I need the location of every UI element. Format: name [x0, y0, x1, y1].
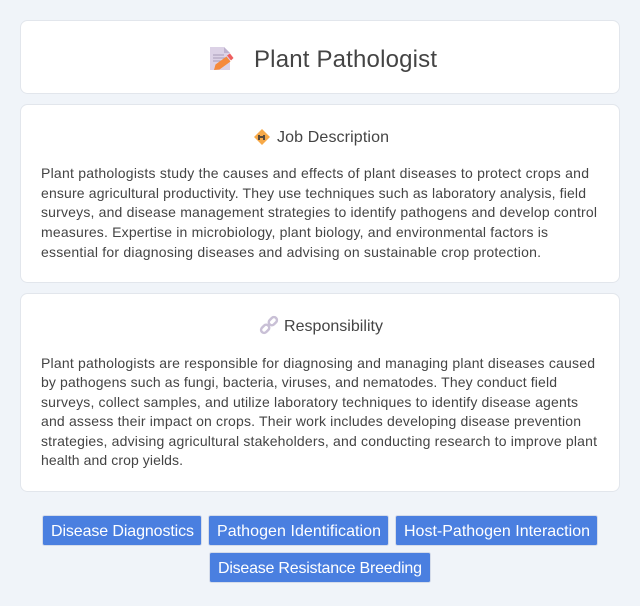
- panel: job description: [20, 104, 620, 282]
- tag: host-pathogen interaction: [396, 516, 598, 546]
- panel: title: [20, 20, 620, 94]
- icon: diamond sign: [254, 129, 270, 145]
- icon: document with pencil: [210, 47, 234, 70]
- icon: chain link: [260, 316, 278, 334]
- job description text: [41, 165, 597, 260]
- heading: responsibility: Responsibility: [284, 318, 383, 335]
- job description text: Plant pathologists study the causes and effects of plant diseases to protect crops and: [41, 165, 589, 181]
- tag: disease diagnostics: [42, 516, 202, 546]
- responsibility text: and assess their impact on crops. Their work includes developing disease prevention: [41, 413, 581, 429]
- title text: Plant Pathologist: [254, 46, 437, 73]
- job description text: measures. Expertise in microbiology, plant biology, and environmental factors is: [41, 224, 548, 240]
- responsibility text: health and crop yields.: [41, 452, 183, 468]
- tag: disease resistance breeding: Disease Resistance Breeding: [218, 560, 422, 577]
- responsibility text: Plant pathologists are responsible for diagnosing and managing plant diseases caused: [41, 355, 595, 371]
- tag: pathogen identification: [208, 516, 388, 546]
- job description text: ensure agricultural productivity. They use techniques such as laboratory analysis, field: [41, 185, 586, 201]
- tag: disease resistance breeding: [210, 552, 430, 582]
- responsibility text: by pathogens such as fungi, bacteria, viruses, and nematodes. They conduct field: [41, 374, 557, 390]
- heading: job description: Job Description: [277, 129, 389, 146]
- tag: pathogen identification: Pathogen Identification: [217, 523, 381, 540]
- job description text: surveys, and disease management strategies to identify pathogens and develop control: [41, 204, 597, 220]
- tag: host-pathogen interaction: Host-Pathogen Interaction: [404, 523, 590, 540]
- responsibility text: [41, 355, 597, 468]
- job description text: essential for diagnosing diseases and advising on sustainable crop protection.: [41, 244, 541, 260]
- responsibility text: strategies, advising agricultural stakeholders, and conducting research to improve plant: [41, 433, 597, 449]
- panel: responsibility: [20, 294, 620, 492]
- tag: disease diagnostics: Disease Diagnostics: [51, 523, 194, 540]
- responsibility text: surveys, collect samples, and utilize laboratory techniques to identify disease agents: [41, 394, 578, 410]
